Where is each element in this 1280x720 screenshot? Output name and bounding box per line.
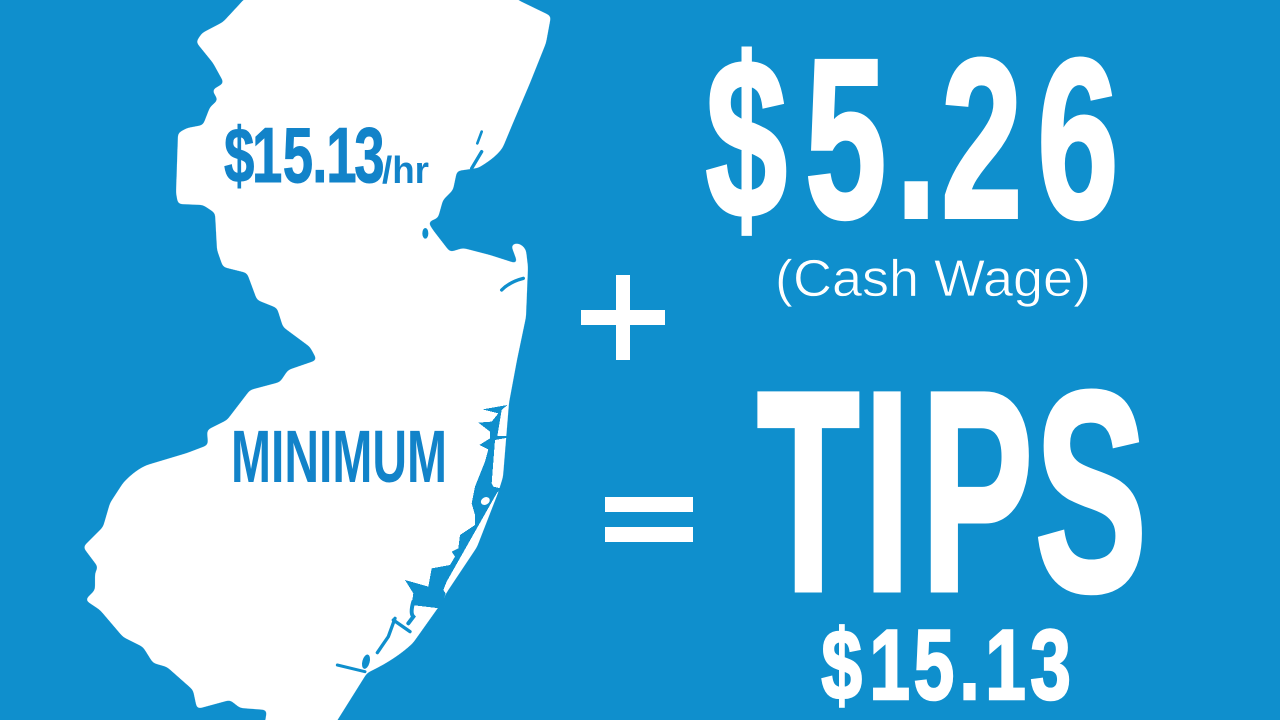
map label: per hour: /hr [382, 150, 429, 192]
total amount: $15.13 [821, 610, 1071, 720]
state outline [83, 0, 551, 720]
map: New Jersey silhouette with labels [83, 0, 551, 720]
map label: MINIMUM: MINIMUM [231, 415, 447, 498]
coastal bays and inlets [337, 405, 508, 672]
cash wage amount: $5.26 [706, 13, 1119, 266]
map label: $15.13: $15.13 [224, 112, 385, 199]
tips heading: TIPS [757, 332, 1147, 651]
cash wage caption: (Cash Wage) [775, 250, 1091, 308]
plus sign [581, 275, 665, 360]
equals sign [605, 497, 693, 542]
